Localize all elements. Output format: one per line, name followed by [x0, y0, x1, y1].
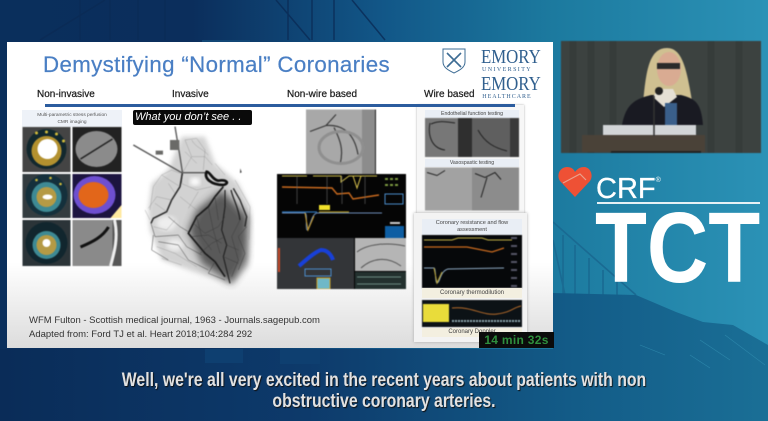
CRF wordmark: CRF®: [596, 173, 661, 205]
column heading: non-invasive: Non-invasive: [37, 89, 95, 100]
panel: coronary resistance and flow: [414, 213, 527, 342]
panel: CMR imaging: [22, 110, 122, 267]
logo divider: [597, 202, 760, 204]
slide title: Demystifying “Normal” Coronaries: [43, 52, 390, 77]
angiogram image: [306, 108, 377, 174]
caption: doppler: Coronary Doppler: [448, 329, 496, 335]
citation text: Adapted from: Ford TJ et al. Heart 2018;104:284 292: [29, 329, 252, 340]
caption: resistance: [422, 219, 522, 235]
Emory Healthcare wordmark: EMORY: [481, 73, 541, 95]
thermodilution trace: [421, 234, 523, 288]
banner: what you don't see: What you don’t see . .: [135, 111, 241, 123]
speaker video: [560, 40, 762, 154]
caption: vasospastic: Vasospastic testing: [450, 160, 494, 166]
FFR pressure monitor: [276, 173, 407, 290]
caption subtitle: [122, 370, 646, 412]
caption: endothelial: [425, 110, 519, 118]
citation text: WFM Fulton - Scottish medical journal, 1963 - Journals.sagepub.com: [29, 315, 320, 326]
icon: CRF heart: [558, 167, 592, 197]
column heading: invasive: Invasive: [172, 89, 209, 100]
caption subtitle: Well, we're all very excited in the recent years about patients with non: [122, 370, 646, 391]
endothelial angiograms: [424, 117, 520, 158]
panel: endothelial and vasospastic testing: [417, 105, 524, 215]
Emory University wordmark: UNIVERSITY: [482, 67, 532, 73]
citation text: [29, 315, 320, 340]
column heading: non-wire based: Non-wire based: [287, 89, 357, 100]
caption: CMR: CMR imaging: [57, 120, 87, 125]
Emory Healthcare wordmark: HEALTHCARE: [482, 94, 532, 100]
TCT wordmark: TCT: [595, 192, 760, 304]
caption: CMR: Multi-parametric stress perfusion: [37, 113, 107, 118]
caption: resistance: Coronary resistance and flow assessment: [436, 220, 508, 232]
timer badge: 14 min 32s: [484, 333, 549, 347]
caption: endothelial: Endothelial function testing: [441, 111, 503, 117]
CRF logo: [558, 167, 661, 205]
icon: Emory shield: [442, 48, 466, 74]
doppler trace: [421, 299, 523, 328]
heading rule: [45, 104, 515, 106]
caption: thermodilution: [422, 288, 522, 298]
caption: thermodilution: Coronary thermodilution: [440, 290, 504, 296]
Emory logo: [442, 46, 541, 100]
slide panel: [7, 42, 553, 348]
caption: vasospastic: [425, 159, 519, 167]
vasospastic angiograms: [424, 166, 520, 211]
Emory University wordmark: EMORY: [481, 46, 541, 68]
CMR image grid: [22, 126, 122, 267]
caption: doppler: [422, 328, 522, 337]
column heading: wire based: Wire based: [424, 89, 475, 100]
caption subtitle: obstructive coronary arteries.: [272, 391, 496, 412]
coronary cast image: [132, 126, 254, 288]
caption: CMR: [22, 110, 122, 127]
